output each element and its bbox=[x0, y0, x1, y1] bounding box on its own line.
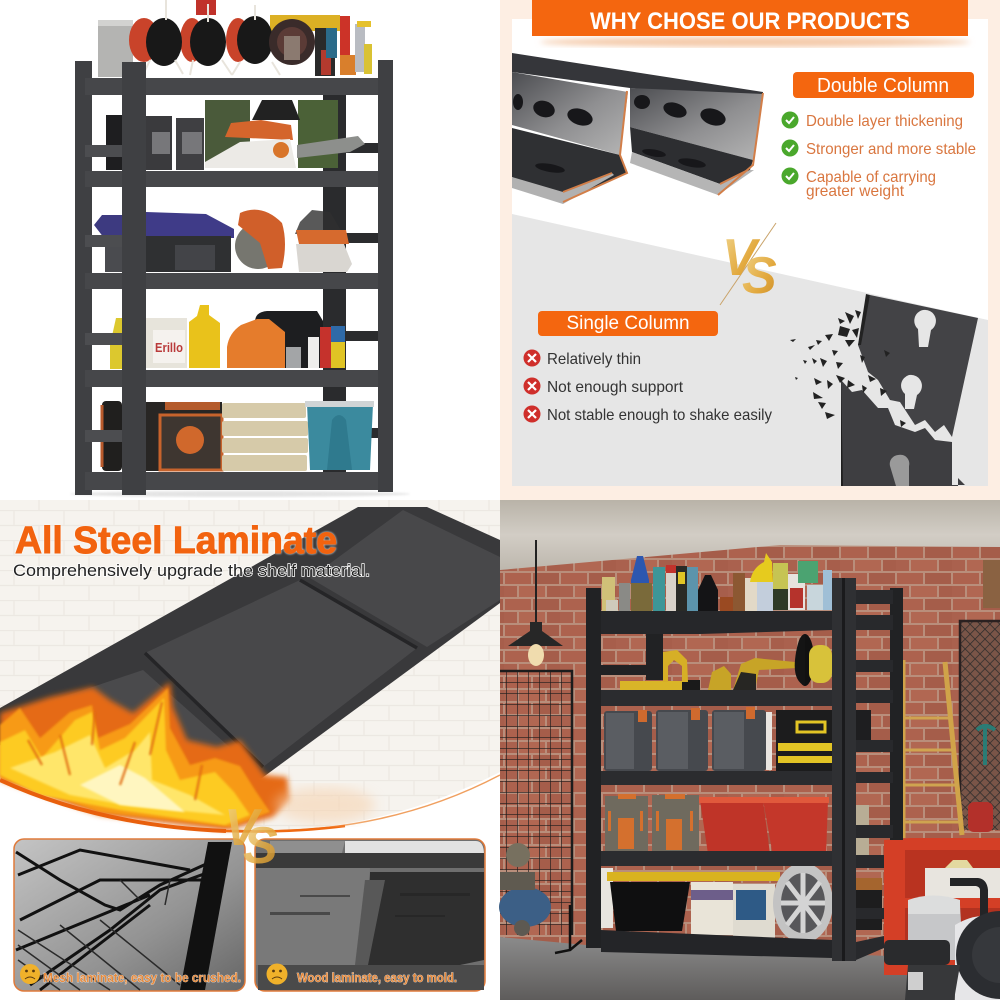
items: fourth shelf bbox=[110, 305, 345, 369]
title banner: WHY CHOSE OUR PRODUCTS bbox=[590, 8, 910, 35]
panel: all steel laminate bbox=[0, 500, 500, 1000]
double column benefits list: greater weight bbox=[806, 183, 905, 200]
items: third shelf bbox=[94, 210, 352, 272]
VS emblem: V bbox=[224, 799, 263, 857]
single column gray background bbox=[512, 214, 988, 486]
pendant lamp bbox=[508, 540, 563, 666]
shelf rear posts bbox=[586, 588, 903, 948]
wire grid left bbox=[500, 670, 572, 935]
double column benefits list bbox=[782, 112, 976, 200]
panel: why chose our products bbox=[500, 0, 1000, 500]
shelf boards and front posts bbox=[85, 60, 393, 495]
VS emblem: V bbox=[722, 229, 761, 287]
items: fourth shelf totes bbox=[605, 794, 829, 856]
single column heading bbox=[538, 311, 718, 336]
curved orange edge bbox=[230, 775, 500, 831]
panel: garage scene photo bbox=[499, 500, 1000, 1000]
items: top shelf bbox=[98, 0, 372, 77]
VS emblem: S bbox=[742, 247, 777, 305]
caption: mesh laminate: Mesh laminate, easy to be crushed. bbox=[43, 970, 241, 985]
flames bbox=[0, 682, 290, 830]
title banner bbox=[532, 0, 968, 36]
VS emblem bbox=[720, 223, 777, 305]
caption: wood laminate: Wood laminate, easy to mold. bbox=[297, 970, 457, 985]
items: bottom shelf bbox=[102, 401, 374, 471]
air compressor small bbox=[499, 843, 551, 936]
tripod bbox=[555, 905, 582, 953]
broken single column bbox=[790, 294, 978, 486]
panel: shelf product photo bbox=[0, 0, 500, 500]
red cabinet bbox=[884, 838, 1000, 975]
double column heading: Double Column bbox=[817, 75, 949, 97]
floor bbox=[500, 937, 1000, 1000]
single column drawbacks list: Relatively thin bbox=[547, 351, 641, 368]
shelf boards and side rails bbox=[601, 578, 893, 961]
double column benefits list: Capable of carrying bbox=[806, 169, 936, 186]
items: fourth shelf: Erillo bbox=[155, 340, 183, 355]
steel shelf board bbox=[0, 507, 500, 790]
single column drawbacks list: Not stable enough to shake easily bbox=[547, 407, 772, 424]
poster on wall bbox=[983, 560, 1000, 608]
double column benefits list: Double layer thickening bbox=[806, 113, 963, 130]
single column drawbacks list bbox=[524, 350, 772, 424]
single column drawbacks list: Not enough support bbox=[547, 379, 684, 396]
photo: wood laminate bbox=[255, 839, 485, 991]
caption: mesh laminate bbox=[20, 964, 241, 985]
foreground pressure washer bbox=[884, 878, 1000, 1000]
double column benefits list: Stronger and more stable bbox=[806, 141, 976, 158]
items: second shelf tools bbox=[620, 634, 832, 691]
subheading: Comprehensively upgrade the shelf material. bbox=[13, 561, 370, 580]
items: third shelf boxes bbox=[604, 707, 832, 771]
double column steel image bbox=[512, 53, 763, 204]
items: bottom shelf bbox=[601, 863, 882, 943]
shelf rear posts and rails bbox=[75, 61, 378, 495]
single column heading: Single Column bbox=[566, 313, 690, 334]
photo: mesh laminate bbox=[14, 839, 245, 991]
VS emblem: S bbox=[243, 817, 278, 875]
heading: all steel laminate: All Steel Laminate bbox=[15, 520, 337, 562]
VS emblem bbox=[224, 799, 278, 875]
double column heading bbox=[793, 72, 974, 98]
items: second shelf bbox=[106, 100, 365, 170]
items: top shelf products bbox=[602, 553, 832, 616]
ceiling bbox=[500, 500, 1000, 570]
caption: wood laminate bbox=[266, 964, 457, 985]
wire grid right and ladder bbox=[903, 620, 1000, 838]
